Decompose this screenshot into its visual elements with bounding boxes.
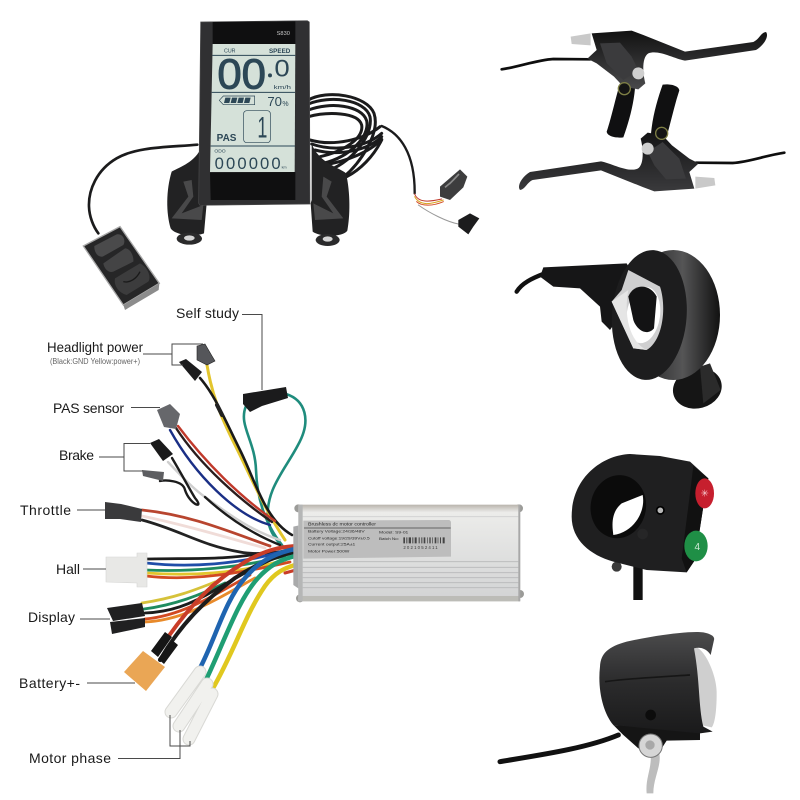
odometer label: ODO [214,148,226,154]
brake wires [160,458,280,545]
display wires [142,550,290,622]
lcd screen: km [282,166,287,170]
connector: hall [106,553,147,587]
right handlebar clamp [311,143,349,236]
lcd screen: % [282,101,289,108]
controller label: Battery Voltage:24/36/48V [308,530,365,534]
brake levers [502,31,784,414]
display cable coil [308,95,415,193]
brake lever upper [502,31,767,138]
headlight [500,632,717,793]
switch hole [586,471,651,543]
button pad [83,227,159,310]
display body [199,21,310,205]
label: hall: Hall [56,561,80,577]
connector: headlight power yellow [197,344,215,365]
controller label: Motor Power:500W [308,549,350,553]
lcd screen: 0 [274,56,290,83]
connector: PAS sensor [157,404,180,429]
battery percent: 70 [267,94,282,109]
connector: self study [243,387,288,412]
display unit [83,21,479,310]
controller box [293,504,524,602]
hall wires [146,552,290,578]
label: motor phase: Motor phase [29,750,111,766]
controller ribs [303,517,518,588]
leader lines [77,314,262,758]
model label: S830 [277,31,290,37]
label: display: Display [28,609,75,625]
speed readout: 00 [217,50,266,98]
controller label: Brushless dc motor controller [308,522,377,527]
label: brake: Brake [59,447,94,463]
label: throttle: Throttle [20,502,71,518]
motor phase wires [200,549,295,690]
connector: brake grey [142,470,164,481]
controller label: 2021052411 [403,545,438,550]
throttle wires [142,510,290,553]
brake lever lower [519,84,784,191]
label: headlight wire note: (Black:GND Yellow:power+) [50,357,140,366]
connector: XT60 battery [124,632,178,691]
button pad cable [89,145,197,233]
left handlebar clamp [167,150,207,235]
connector: throttle [105,502,142,522]
PAS wires [170,426,275,525]
self study loop wires [244,394,305,552]
function switch: ✳ [701,489,709,499]
display connector wires [415,194,458,224]
label: self study: Self study [176,305,239,321]
controller label: Batch No: [379,537,399,541]
function switch: 4 [695,542,701,553]
odometer: 000000 [215,154,281,173]
current label: CUR [224,48,236,54]
speed label: SPEED [269,48,291,55]
label: headlight power: Headlight power [47,339,143,355]
unit: km/h [274,85,291,91]
headlight wires [200,365,292,540]
wiring harness [142,365,305,690]
controller label: Cutoff voltage:19/29/39V±0.5 [308,537,370,541]
label: PAS sensor: PAS sensor [53,400,124,416]
connector: display [107,603,145,634]
function switch [572,454,714,600]
lcd screen [210,44,295,173]
connectors: motor phase sleeves [171,672,212,739]
label: battery: Battery+- [19,675,80,691]
red button [695,478,714,508]
controller label: Model: S9-01 [379,531,408,535]
assist box [244,111,270,143]
battery gauge [219,96,255,105]
display connectors [440,169,479,234]
controller label: Current output:25A±1 [308,543,355,547]
assist level: 1 [257,111,267,144]
barcode [403,537,445,543]
controller label [303,520,451,559]
thumb throttle [517,248,726,414]
battery wires [160,546,295,660]
PAS label: PAS [217,133,237,144]
green button [684,531,708,561]
connector: headlight power black [179,359,202,381]
connector: brake black [150,439,173,461]
